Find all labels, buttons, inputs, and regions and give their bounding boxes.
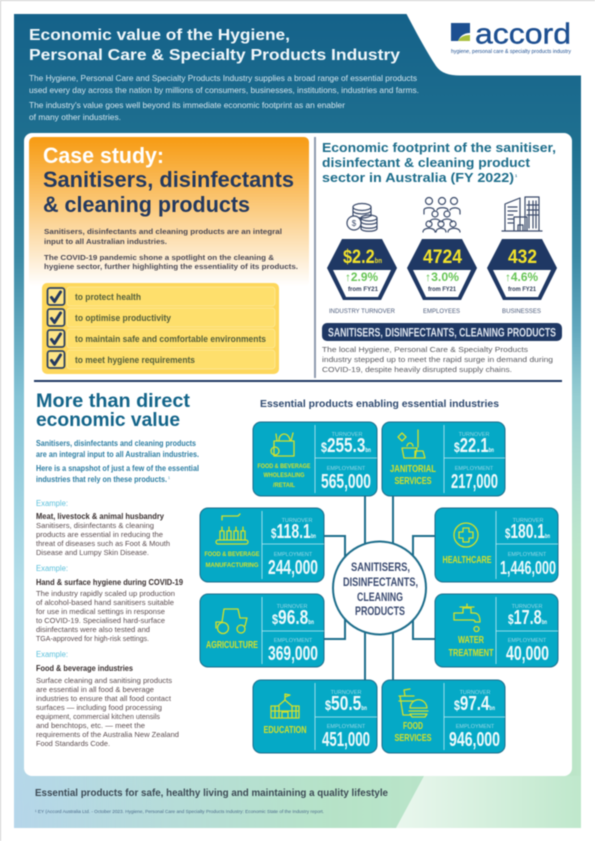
card: food and beverage manufacturing: TURNOVER bbox=[282, 518, 312, 524]
intro text: The industry's value goes well beyond its immediate economic footprint as an enabler bbox=[29, 100, 345, 110]
card: food services: FOOD bbox=[403, 720, 423, 732]
section rule bbox=[34, 380, 562, 382]
icon: grocery bag bbox=[271, 433, 294, 456]
title bbox=[29, 27, 400, 64]
example: food and beverage: Food & beverage industries bbox=[36, 663, 133, 673]
footer tagline: Essential products for safe, healthy living and maintaining a quality lifestyle bbox=[35, 787, 388, 799]
footprint text: COVID-19, despite heavily disrupted supply chains. bbox=[322, 365, 512, 374]
case study heading: Sanitisers, disinfectants bbox=[43, 167, 294, 192]
stat: businesses: from FY21 bbox=[508, 287, 537, 293]
example: meat, livestock: Example: bbox=[36, 499, 68, 508]
centre circle bbox=[333, 542, 426, 634]
logo: accord: hygiene, personal care & specialty products industry bbox=[451, 49, 572, 55]
checklist: to meet hygiene requirements bbox=[75, 355, 195, 366]
sector banner bbox=[322, 323, 562, 341]
footer source note: ¹ EY (Accord Australia Ltd. - October 2023. Hygiene, Personal Care and Specialty Products Industry: Economic State of the Industry report. bbox=[35, 809, 324, 814]
icon: production line bbox=[216, 514, 248, 544]
card: healthcare: TURNOVER bbox=[513, 518, 543, 524]
example: hand and surface hygiene: to COVID-19. Specialised hard-surface bbox=[36, 616, 165, 625]
checklist: to optimise productivity bbox=[75, 313, 172, 324]
example: hand and surface hygiene: TGA-approved for high-risk settings. bbox=[36, 634, 149, 643]
section intro: Here is a snapshot of just a few of the essential bbox=[36, 463, 199, 473]
example: food and beverage: surfaces — including food processing bbox=[36, 703, 162, 712]
intro text: of many other industries. bbox=[29, 112, 121, 122]
case study text: hygiene sector, further highlighting the essentiality of its products. bbox=[44, 262, 298, 271]
section intro: 1 bbox=[168, 476, 170, 480]
card: food and beverage wholesaling: /RETAIL bbox=[273, 482, 295, 489]
centre circle: CLEANING bbox=[357, 590, 403, 604]
card: food and beverage wholesaling: WHOLESALING bbox=[264, 472, 304, 479]
card: water treatment: EMPLOYMENT bbox=[508, 638, 547, 644]
card: janitorial services: TURNOVER bbox=[459, 432, 489, 438]
card: janitorial services: $22.1bn bbox=[454, 435, 494, 457]
stat: industry turnover: ↑2.9% bbox=[345, 272, 378, 284]
card: water treatment bbox=[435, 594, 558, 667]
card: education bbox=[253, 680, 377, 753]
stat: employees: ↑3.0% bbox=[425, 272, 459, 284]
panel: economic footprint bbox=[322, 140, 562, 374]
example: hand and surface hygiene bbox=[36, 564, 183, 643]
card: education: 451,000 bbox=[322, 729, 370, 751]
stat: businesses: ↑4.6% bbox=[505, 272, 538, 284]
stat: businesses: BUSINESSES bbox=[502, 309, 541, 315]
example: meat, livestock bbox=[36, 499, 170, 557]
card: healthcare: 1,446,000 bbox=[500, 558, 556, 578]
case study heading bbox=[43, 143, 294, 217]
icon: people bbox=[423, 198, 460, 232]
card: food and beverage wholesaling: $255.3bn bbox=[321, 435, 371, 457]
card: food and beverage manufacturing: $118.1bn bbox=[271, 521, 316, 543]
example: hand and surface hygiene: The industry rapidly scaled up production bbox=[36, 589, 175, 598]
example: hand and surface hygiene: Hand & surface hygiene during COVID-19 bbox=[36, 577, 183, 587]
stat: employees: EMPLOYEES bbox=[423, 309, 460, 315]
icon: cleaning bucket bbox=[398, 430, 425, 458]
stat: industry turnover: from FY21 bbox=[348, 287, 379, 293]
example: food and beverage: Example: bbox=[36, 650, 68, 659]
example: meat, livestock: threat of diseases such as Foot & Mouth bbox=[36, 539, 170, 548]
checklist bbox=[42, 283, 279, 374]
section intro: are an integral input to all Australian industries. bbox=[36, 449, 199, 459]
card: education: $50.5bn bbox=[325, 693, 367, 715]
panel: case study bbox=[29, 137, 309, 374]
card: water treatment: TREATMENT bbox=[448, 647, 494, 659]
example: hand and surface hygiene: of alcohol-based hand sanitisers suitable bbox=[36, 598, 174, 607]
card: agriculture bbox=[200, 594, 324, 667]
divider bbox=[314, 137, 316, 378]
intro text bbox=[29, 73, 419, 122]
card: janitorial services: JANITORIAL bbox=[390, 463, 436, 475]
logo: accord: accord bbox=[475, 18, 571, 50]
intro text: used every day across the nation by millions of consumers, businesses, institutions, industries and farms. bbox=[29, 85, 419, 95]
card: food and beverage wholesaling: FOOD & BEVERAGE bbox=[258, 463, 311, 470]
example: food and beverage: are essential in all food & beverage bbox=[36, 685, 154, 694]
example: hand and surface hygiene: for use in medical settings in response bbox=[36, 607, 165, 616]
card: food and beverage manufacturing: FOOD & BEVERAGE bbox=[204, 551, 260, 558]
card: water treatment: 40,000 bbox=[506, 643, 549, 665]
card: water treatment: $17.8bn bbox=[508, 607, 547, 629]
checklist: to protect health bbox=[75, 292, 141, 303]
section intro: Sanitisers, disinfectants and cleaning products bbox=[36, 438, 196, 448]
case study text bbox=[44, 227, 298, 271]
title: Economic value of the Hygiene, bbox=[29, 27, 290, 44]
example: food and beverage: industries to ensure that all food contact bbox=[36, 694, 171, 703]
panel: more than direct economic value bbox=[36, 391, 199, 748]
example: food and beverage: and benchtops, etc. — meet the bbox=[36, 721, 145, 730]
card: agriculture: 369,000 bbox=[268, 643, 318, 665]
stat: employees bbox=[407, 239, 477, 315]
card: food and beverage manufacturing: EMPLOYMENT bbox=[274, 552, 313, 558]
title: Personal Care & Specialty Products Industry bbox=[29, 47, 400, 64]
icon: coins bbox=[347, 204, 377, 231]
case study text: input to all Australian industries. bbox=[44, 237, 167, 246]
example: hand and surface hygiene: disinfectants were also tested and bbox=[36, 625, 150, 634]
card: food and beverage wholesaling: EMPLOYMENT bbox=[327, 466, 366, 472]
footprint text: industry stepped up to meet the rapid surge in demand during bbox=[322, 355, 553, 364]
example: meat, livestock: products are essential in reducing the bbox=[36, 530, 163, 539]
card: food and beverage wholesaling: TURNOVER bbox=[332, 432, 362, 438]
icon: medical cross bbox=[454, 523, 478, 547]
section heading: More than direct bbox=[36, 391, 191, 412]
card: food and beverage manufacturing: MANUFACTURING bbox=[206, 562, 258, 569]
card: janitorial services: SERVICES bbox=[394, 475, 432, 487]
centre circle: DISINFECTANTS, bbox=[343, 575, 418, 589]
stat: employees: from FY21 bbox=[428, 287, 457, 293]
diagram connectors bbox=[324, 496, 435, 680]
card: agriculture: TURNOVER bbox=[277, 604, 307, 610]
example: meat, livestock: Meat, livestock & animal husbandry bbox=[36, 511, 164, 521]
stat: businesses: 432 bbox=[508, 247, 537, 268]
card: food services: SERVICES bbox=[394, 732, 432, 744]
example: food and beverage: requirements of the Australia New Zealand bbox=[36, 730, 179, 739]
icon: school bbox=[271, 694, 299, 718]
icon: coins: $ bbox=[352, 219, 357, 228]
footprint heading: disinfectant & cleaning product bbox=[322, 155, 531, 170]
case study heading: & cleaning products bbox=[43, 192, 250, 217]
white content card bbox=[24, 133, 572, 776]
card: education: TURNOVER bbox=[331, 690, 361, 696]
card: janitorial services: EMPLOYMENT bbox=[455, 466, 494, 472]
example: food and beverage: Surface cleaning and sanitising products bbox=[36, 676, 172, 685]
icon: drink and burger bbox=[399, 689, 428, 717]
stat: businesses bbox=[487, 239, 557, 315]
centre circle: PRODUCTS bbox=[355, 604, 405, 618]
stat: industry turnover bbox=[327, 239, 397, 315]
card: food services: TURNOVER bbox=[460, 690, 490, 696]
diagram heading: Essential products enabling essential industries bbox=[260, 398, 499, 410]
card: janitorial services bbox=[382, 422, 505, 496]
icon: tractor bbox=[216, 609, 247, 634]
card: healthcare: $180.1bn bbox=[505, 521, 550, 543]
section heading: economic value bbox=[36, 410, 180, 431]
case study text: Sanitisers, disinfectants and cleaning products are an integral bbox=[44, 227, 282, 236]
stat: industry turnover: INDUSTRY TURNOVER bbox=[329, 309, 396, 315]
card: education: EMPLOYMENT bbox=[327, 724, 366, 730]
card: water treatment: TURNOVER bbox=[512, 604, 542, 610]
example: food and beverage: equipment, commercial kitchen utensils bbox=[36, 712, 160, 721]
card: food services: $97.4bn bbox=[454, 693, 495, 715]
card: janitorial services: 217,000 bbox=[451, 471, 498, 493]
card: agriculture: EMPLOYMENT bbox=[274, 638, 313, 644]
case study text: The COVID-19 pandemic shone a spotlight on the cleaning & bbox=[44, 253, 275, 262]
icon: buildings bbox=[502, 197, 542, 231]
section heading bbox=[36, 391, 191, 431]
card: education: EDUCATION bbox=[264, 724, 306, 736]
case study heading: Case study: bbox=[43, 143, 164, 168]
footprint heading: sector in Australia (FY 2022) bbox=[322, 170, 514, 185]
footprint heading: 1 bbox=[515, 173, 518, 178]
card: food services bbox=[382, 680, 505, 753]
card: food and beverage wholesaling bbox=[253, 422, 377, 496]
section intro: industries that rely on these products. bbox=[36, 474, 167, 484]
card: food and beverage manufacturing: 244,000 bbox=[268, 557, 318, 579]
stat: industry turnover: $2.2bn bbox=[343, 247, 382, 268]
card: healthcare: EMPLOYMENT bbox=[508, 552, 547, 558]
example: food and beverage: Food Standards Code. bbox=[36, 739, 110, 748]
card: agriculture: AGRICULTURE bbox=[206, 639, 258, 651]
card: healthcare bbox=[435, 508, 558, 582]
footprint text: The local Hygiene, Personal Care & Specialty Products bbox=[322, 345, 528, 354]
card: food services: 946,000 bbox=[449, 729, 500, 751]
stat: employees: 4724 bbox=[423, 247, 462, 268]
icon: tap bbox=[454, 604, 480, 632]
section intro bbox=[36, 438, 199, 484]
card: food services: EMPLOYMENT bbox=[456, 724, 495, 730]
example: meat, livestock: Disease and Lumpy Skin Disease. bbox=[36, 548, 149, 557]
card: water treatment: WATER bbox=[458, 634, 484, 646]
example: food and beverage bbox=[36, 650, 179, 748]
logo: accord bbox=[451, 18, 572, 55]
checklist: to maintain safe and comfortable environments bbox=[75, 334, 266, 345]
intro text: The Hygiene, Personal Care and Specialty Products Industry supplies a broad range of essential products bbox=[29, 73, 417, 83]
footprint text bbox=[322, 345, 553, 374]
example: meat, livestock: Sanitisers, disinfectants & cleaning bbox=[36, 521, 154, 530]
card: agriculture: $96.8bn bbox=[272, 607, 314, 629]
footprint heading: Economic footprint of the sanitiser, bbox=[322, 140, 556, 155]
footprint heading bbox=[322, 140, 556, 185]
centre circle: SANITISERS, bbox=[351, 560, 410, 574]
card: healthcare: HEALTHCARE bbox=[442, 554, 492, 566]
card: food and beverage manufacturing bbox=[200, 508, 324, 582]
card: food and beverage wholesaling: 565,000 bbox=[321, 471, 371, 493]
example: hand and surface hygiene: Example: bbox=[36, 564, 68, 573]
